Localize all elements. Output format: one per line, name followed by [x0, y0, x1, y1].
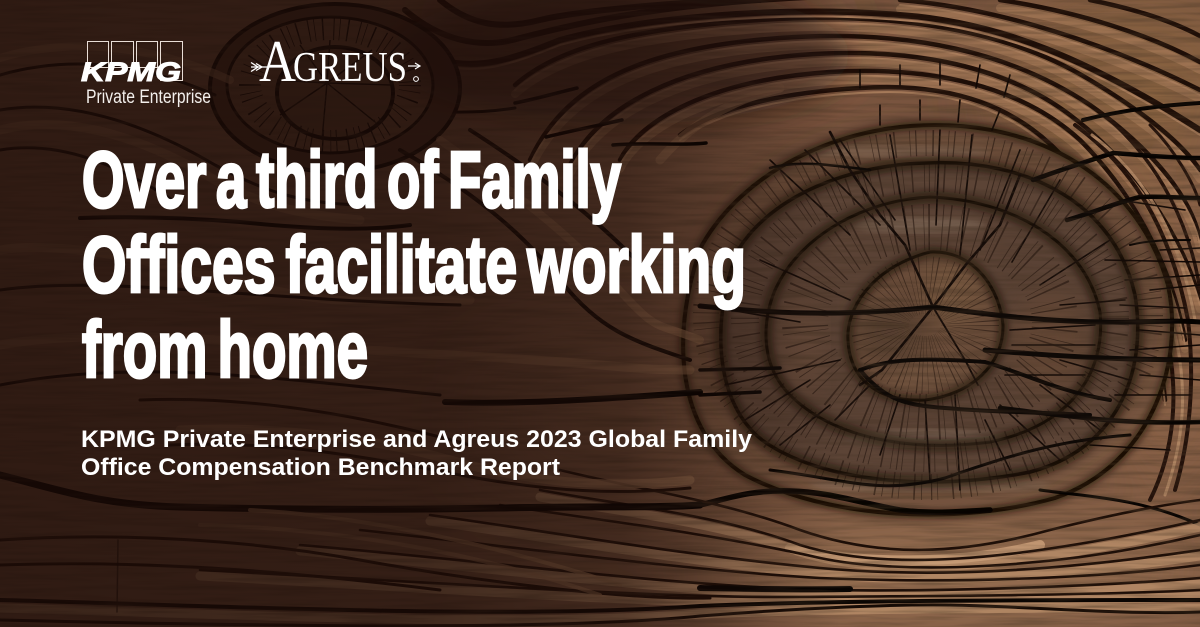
logo: Agreus: [251, 28, 420, 94]
subtitle: Office Compensation Benchmark Report: [81, 454, 560, 481]
subtitle: [81, 426, 752, 481]
radial grain ticks inside rings: [706, 143, 1150, 487]
Agreus wordmark: A: [259, 28, 296, 94]
title: from home: [82, 305, 368, 394]
title: Offices facilitate working: [82, 220, 746, 309]
left-side diagonal grain: [0, 46, 700, 395]
knot ring shadows: [683, 125, 1172, 515]
lower and left wood bands: [0, 392, 1200, 626]
icon: arrows and registered mark: [251, 62, 420, 81]
subtitle: KPMG Private Enterprise and Agreus 2023 Global Family: [81, 426, 752, 453]
Private Enterprise label: Private Enterprise: [86, 87, 211, 108]
main black horizontal cracks: [390, 88, 1200, 525]
title: Over a third of Family: [82, 135, 621, 224]
Agreus wordmark: GREUS: [293, 45, 407, 91]
KPMG wordmark: KPMG: [81, 57, 181, 87]
title: [82, 135, 746, 394]
main knot concentric rings: [683, 125, 1172, 515]
small knot behind Agreus logo: [210, 4, 460, 172]
carved flow bands above and right of the main knot: [405, 0, 1200, 500]
Agreus wordmark: [259, 28, 407, 94]
icon: KPMG four boxes: [88, 42, 182, 80]
radial cracks in knot: [725, 62, 1200, 490]
dark tone over upper band and knot: [390, 0, 1170, 500]
logo: KPMG Private Enterprise: [81, 42, 211, 108]
